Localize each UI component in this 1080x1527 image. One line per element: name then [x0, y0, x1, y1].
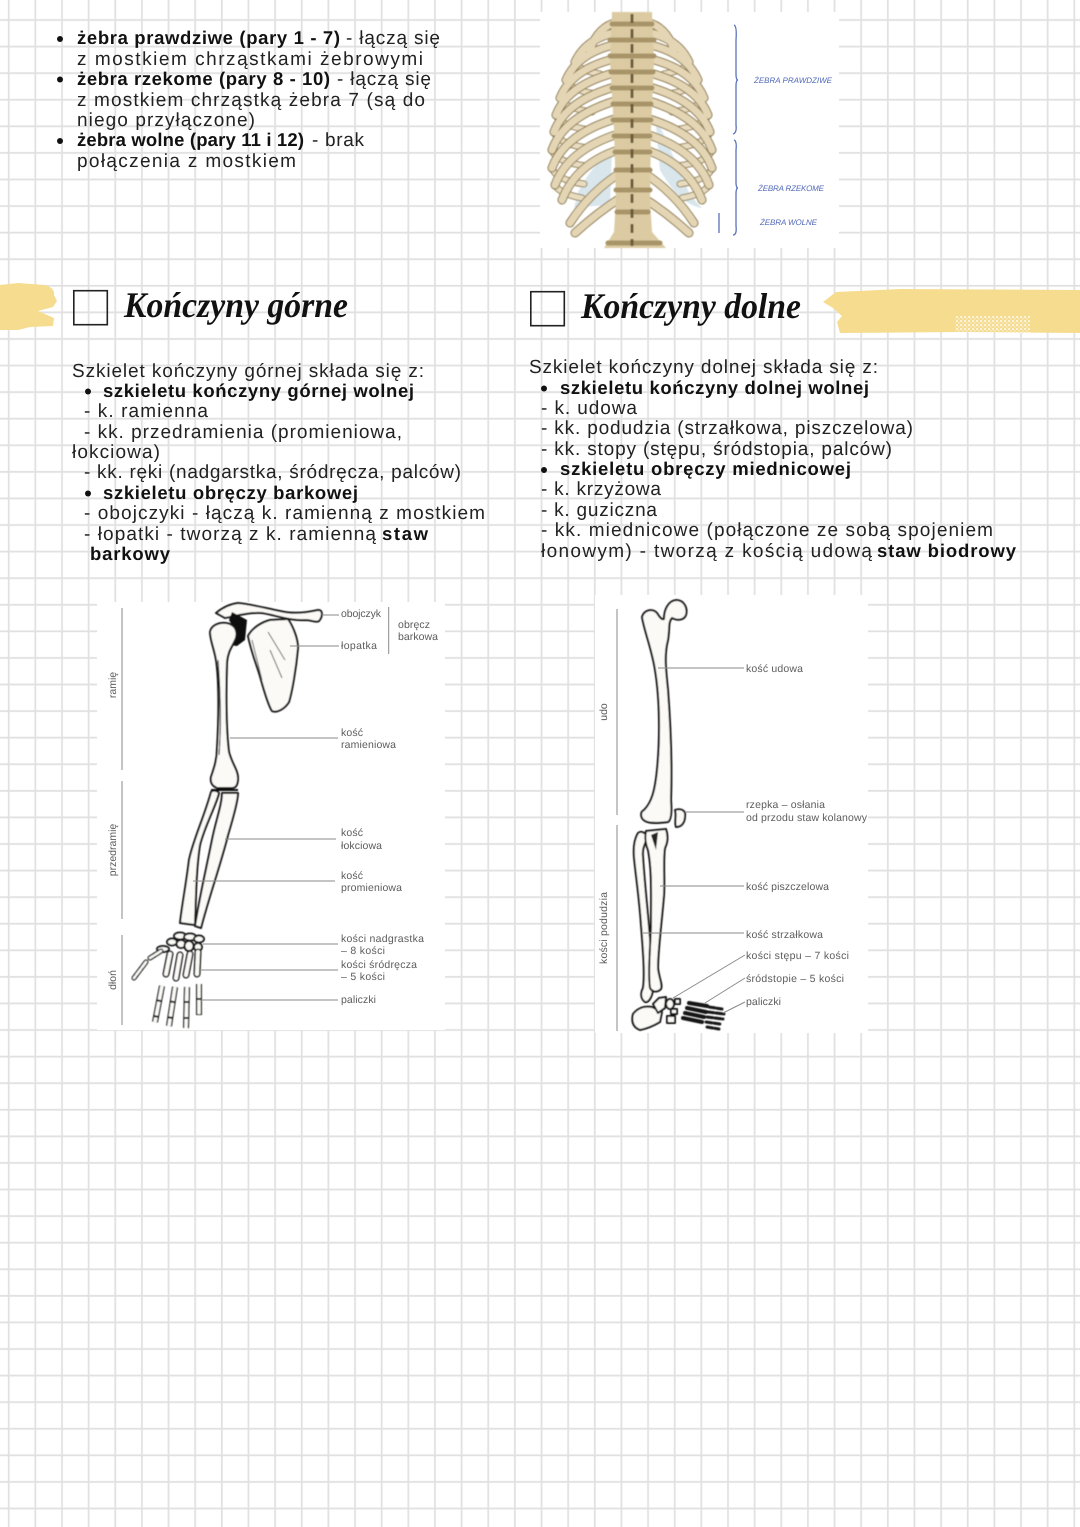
text block: rib types: z mostkiem chrząstkami żebrowymi — [77, 49, 423, 70]
text block: upper limb skeleton: - kk. ręki (nadgarstka, śródręcza, palców) — [84, 462, 461, 483]
arm labels: ramię — [107, 672, 119, 698]
leg labels: śródstopie – 5 kości — [746, 973, 844, 985]
text block: upper limb skeleton: - kk. przedramienia (promieniowa, — [84, 422, 402, 443]
text block: upper limb skeleton: - obojczyki - łączą k. ramienną z mostkiem — [84, 503, 485, 524]
text block: rib types: - brak — [312, 130, 364, 151]
text block: lower limb skeleton: - kk. stopy (stępu, śródstopia, palców) — [541, 439, 892, 460]
leg labels: paliczki — [746, 996, 781, 1008]
leg labels: kość udowa — [746, 663, 803, 675]
brackets — [719, 25, 738, 235]
leg labels: udo — [598, 703, 610, 721]
labels: ŻEBRA RZEKOME — [757, 184, 825, 193]
text block: lower limb skeleton: - k. guziczna — [541, 500, 657, 521]
text block: upper limb skeleton: Szkielet kończyny górnej składa się z: — [72, 361, 424, 382]
arm leader lines — [122, 607, 389, 1025]
arm labels: dłoń — [107, 970, 119, 990]
labels — [753, 76, 833, 227]
leg leader lines — [617, 609, 745, 1031]
image: arm skeleton diagram — [97, 602, 445, 1030]
labels: ŻEBRA PRAWDZIWE — [753, 76, 833, 85]
text block: rib types: niego przyłączone) — [77, 110, 255, 131]
text block: upper limb skeleton: staw — [382, 523, 429, 544]
text block: lower limb skeleton: - k. udowa — [541, 398, 637, 419]
text block: upper limb skeleton: szkieletu obręczy barkowej — [103, 482, 358, 503]
leg labels — [598, 663, 868, 1008]
leg bones — [632, 600, 724, 1030]
leg labels: rzepka – osłania — [746, 799, 825, 811]
leg labels: kość piszczelowa — [746, 881, 829, 893]
arm labels — [107, 608, 438, 1006]
text block: upper limb skeleton: łokciowa) — [72, 442, 160, 463]
highlight swash left — [0, 283, 57, 330]
text block: lower limb skeleton: - kk. miednicowe (połączone ze sobą spojeniem — [541, 520, 993, 541]
text block: upper limb skeleton: - łopatki - tworzą z k. ramienną — [84, 524, 376, 545]
highlight swash right — [823, 289, 1080, 333]
arm labels: łokciowa — [341, 840, 382, 852]
leg labels: kość strzałkowa — [746, 929, 823, 941]
image: leg skeleton diagram — [595, 595, 868, 1033]
image: rib cage diagram — [540, 12, 839, 248]
arm labels: ramieniowa — [341, 739, 396, 751]
text block: rib types: żebra wolne (pary 11 i 12) — [77, 129, 304, 150]
arm labels: kość — [341, 727, 363, 739]
text block: lower limb skeleton: staw biodrowy — [877, 540, 1017, 561]
leg labels: kości podudzia — [598, 892, 610, 964]
text block: upper limb skeleton: barkowy — [90, 543, 171, 564]
text block: lower limb skeleton: szkieletu obręczy miednicowej — [560, 458, 851, 479]
text block: upper limb skeleton — [72, 361, 485, 564]
arm labels: kość — [341, 827, 363, 839]
text block: rib types: z mostkiem chrząstką żebra 7 (są do — [77, 90, 425, 111]
arm labels: promieniowa — [341, 882, 402, 894]
arm labels: kości nadgrastka — [341, 933, 424, 945]
text block: rib types: połączenia z mostkiem — [77, 151, 296, 172]
checkbox left — [74, 291, 107, 325]
leg labels: od przodu staw kolanowy — [746, 812, 868, 824]
arm labels: kość — [341, 870, 363, 882]
arm labels: obręcz — [398, 619, 430, 631]
heading: lower limbs: Kończyny dolne — [580, 286, 801, 326]
arm labels: przedramię — [107, 824, 119, 876]
text block: lower limb skeleton: szkieletu kończyny dolnej wolnej — [560, 377, 869, 398]
text block: rib types: żebra prawdziwe (pary 1 - 7) — [77, 27, 340, 48]
text block: rib types: żebra rzekome (pary 8 - 10) — [77, 68, 330, 89]
checkbox right — [531, 292, 564, 326]
text block: rib types — [57, 27, 440, 172]
arm labels: łopatka — [341, 640, 377, 652]
leg labels: kości stępu – 7 kości — [746, 950, 849, 962]
text block: rib types: - łączą się — [337, 69, 431, 90]
text block: lower limb skeleton: łonowym) - tworzą z kością udową — [541, 541, 872, 562]
text block: lower limb skeleton: - kk. podudzia (strzałkowa, piszczelowa) — [541, 418, 913, 439]
arm labels: barkowa — [398, 631, 438, 643]
arm labels: obojczyk — [341, 608, 382, 620]
text block: lower limb skeleton: Szkielet kończyny dolnej składa się z: — [529, 357, 878, 378]
arm labels: – 5 kości — [341, 971, 385, 983]
arm labels: kości śródręcza — [341, 959, 417, 971]
text block: lower limb skeleton — [529, 357, 1017, 562]
arm labels: paliczki — [341, 994, 376, 1006]
heading: upper limbs: Kończyny górne — [123, 285, 348, 325]
text block: upper limb skeleton: - k. ramienna — [84, 401, 208, 422]
labels: ŻEBRA WOLNE — [759, 218, 818, 227]
text block: rib types: - łączą się — [346, 28, 440, 49]
text block: upper limb skeleton: szkieletu kończyny górnej wolnej — [103, 380, 414, 401]
text block: lower limb skeleton: - k. krzyżowa — [541, 479, 661, 500]
arm bones — [134, 603, 322, 1028]
arm labels: – 8 kości — [341, 945, 385, 957]
